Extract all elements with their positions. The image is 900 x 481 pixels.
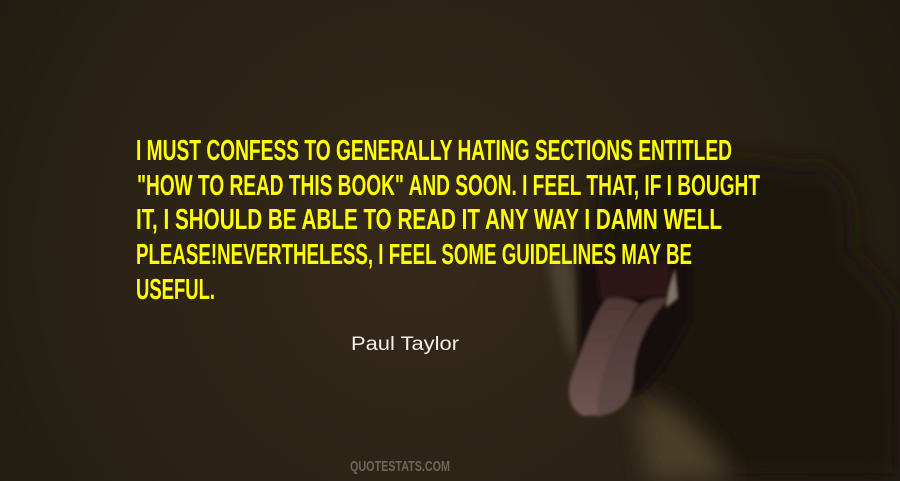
line 5: USEFUL. xyxy=(136,274,215,306)
quote text xyxy=(136,135,760,306)
tongue right lobe xyxy=(597,298,668,416)
animal head and body xyxy=(590,160,900,481)
mouth interior xyxy=(596,262,670,300)
animal photo xyxy=(548,160,900,481)
tongue left lobe xyxy=(569,297,640,416)
watermark: QUOTESTATS.COM xyxy=(350,458,450,475)
pale cheek fur xyxy=(548,258,577,362)
dark mouth xyxy=(578,262,690,395)
chest fur xyxy=(639,398,735,481)
author: Paul Taylor xyxy=(351,334,460,355)
tooth xyxy=(666,268,678,308)
